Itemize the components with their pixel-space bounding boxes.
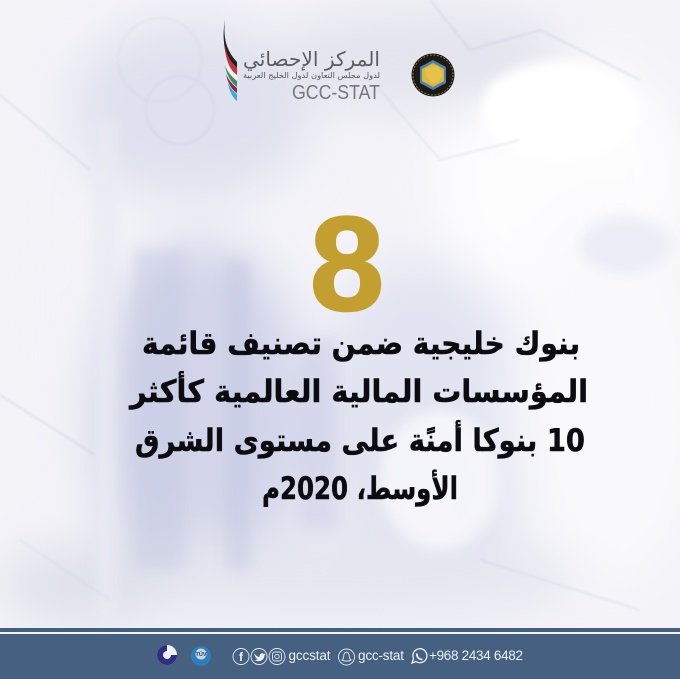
logo: Arabic organisation name: المركز الإحصائي: [243, 47, 380, 72]
icon: TUV badge: [191, 646, 211, 666]
handle: gcc-stat: gcc-stat: [358, 648, 404, 663]
phone number: +968 2434 6482: [429, 648, 523, 663]
handle: gccstat: gccstat: [288, 648, 331, 663]
icon: snapchat: [338, 649, 354, 665]
footer bar: [0, 628, 680, 679]
icon: facebook: [233, 648, 249, 664]
icon: whatsapp: [412, 649, 427, 663]
icon: facebook: f: [239, 650, 244, 664]
icon: certification badge: [157, 645, 177, 665]
logo: Arabic subtitle: لدول مجلس التعاون لدول الخليج العربية: [243, 71, 380, 80]
icon: instagram: [269, 648, 285, 664]
icon: twitter: [251, 648, 267, 664]
icon: GCC emblem: [412, 54, 454, 96]
headline line 1: بنوك خليجية ضمن تصنيف قائمة: [142, 326, 580, 362]
headline line 2: المؤسسات المالية العالمية كأكثر: [128, 371, 588, 410]
big number 8: 8: [310, 190, 384, 339]
headline text: [128, 326, 588, 507]
logo: GCC-STAT: GCC-STAT: [292, 82, 380, 104]
headline line 4: الأوسط، 2020م: [262, 469, 458, 507]
headline line 3: 10 بنوكا أمنًة على مستوى الشرق: [135, 420, 585, 459]
icon: TUV badge: TÜV: [196, 651, 207, 658]
logo: ribbon mark: [224, 19, 237, 101]
